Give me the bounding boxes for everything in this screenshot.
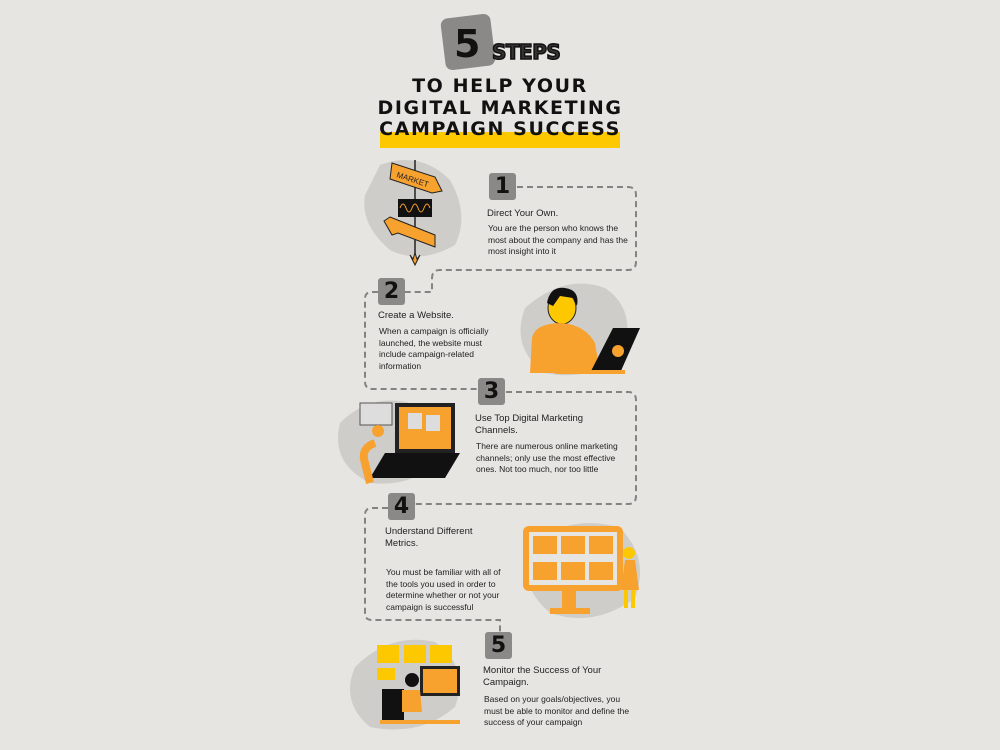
number 1	[489, 173, 516, 200]
illustration: laptop with marketing channels	[338, 400, 460, 484]
illustration: person with laptop	[520, 284, 640, 376]
number 5: 5	[491, 633, 506, 658]
number 4	[388, 493, 415, 520]
step 5 heading: Monitor the Success of Your Campaign.	[483, 665, 601, 688]
title: CAMPAIGN SUCCESS	[379, 118, 621, 140]
step 3 body: There are numerous online marketing channels; only use the most effective ones. Not too much, nor too little	[476, 441, 618, 474]
step 4 heading: Understand Different Metrics.	[385, 526, 472, 549]
number 2	[378, 278, 405, 305]
number 4: 4	[394, 494, 409, 519]
title badge: 5 steps	[440, 14, 560, 70]
step 1	[364, 160, 628, 266]
step 5	[350, 632, 629, 730]
yellow highlight bar	[380, 132, 620, 148]
illustration: market signpost: MARKET	[395, 170, 430, 189]
step 4 body: You must be familiar with all of the tools you used in order to determine whether or not your campaign is successful	[386, 567, 500, 612]
title	[377, 14, 623, 148]
illustration: metrics monitor	[523, 523, 640, 618]
title: DIGITAL MARKETING	[377, 97, 623, 119]
step 2	[378, 278, 640, 376]
title badge: 5 steps: 5	[454, 22, 480, 66]
number 3	[478, 378, 505, 405]
title badge: 5 steps: STEPS	[492, 40, 560, 64]
step 1 body: You are the person who knows the most about the company and has the most insight into it	[488, 223, 628, 256]
step 4	[385, 493, 640, 618]
step 5 body: Based on your goals/objectives, you must be able to monitor and define the success of your campaign	[484, 694, 629, 727]
number 1: 1	[495, 174, 510, 199]
number 2: 2	[384, 279, 399, 304]
step 2 body: When a campaign is officially launched, the website must include campaign-related information	[379, 326, 488, 370]
step 3 heading: Use Top Digital Marketing Channels.	[475, 413, 583, 436]
number 3: 3	[484, 379, 499, 404]
illustration: person at computer	[350, 640, 460, 730]
step 3	[338, 378, 618, 484]
step 2 heading: Create a Website.	[378, 310, 454, 321]
illustration: market signpost	[364, 160, 462, 266]
title: TO HELP YOUR	[412, 75, 588, 97]
step 1 heading: Direct Your Own.	[487, 208, 558, 219]
number 5	[485, 632, 512, 659]
